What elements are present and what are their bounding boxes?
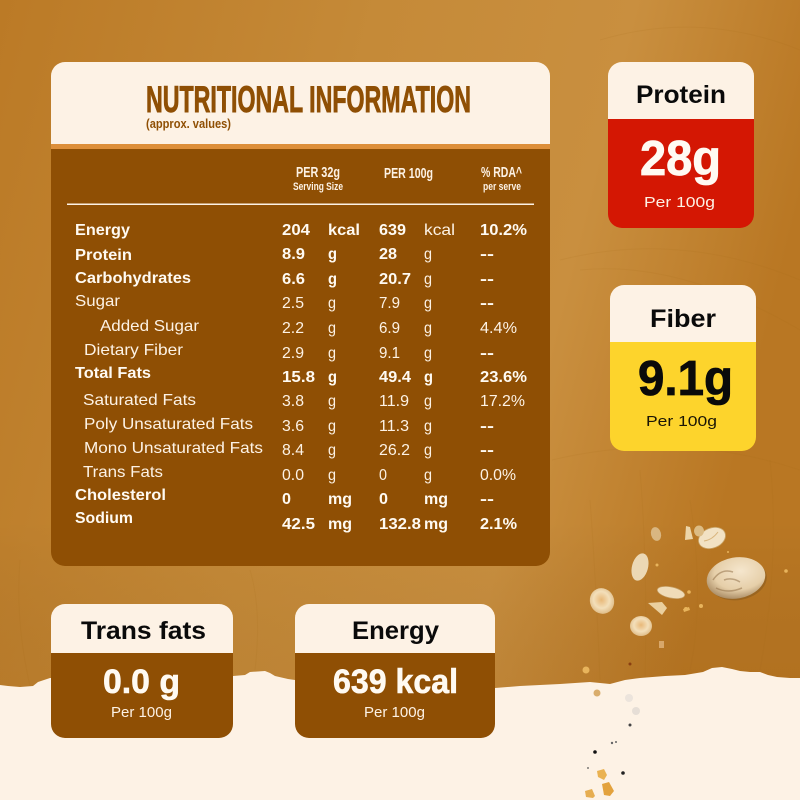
row: sodium: mg [424,516,448,533]
column header: rda [481,164,522,193]
row: protein: -- [480,246,494,263]
row: dietary fiber: -- [480,345,494,362]
row: energy: 10.2% [480,222,527,239]
card: trans fats: Per 100g [111,704,172,721]
row: total fats: 49.4 [379,369,411,386]
row: cholesterol: 0 [282,491,291,508]
row: poly unsaturated fats: Poly Unsaturated Fats [84,416,253,433]
row: mono unsaturated fats: Mono Unsaturated Fats [84,440,263,457]
column header: rda: per serve [483,181,521,193]
row: protein: 28 [379,246,397,263]
row: protein [75,246,494,264]
card: fiber [610,285,756,451]
row: total fats: 15.8 [282,369,315,386]
row: sugar: 7.9 [379,295,400,312]
row: saturated fats: 17.2% [480,393,525,410]
panel: nutritional information [51,62,550,566]
illustration: nuts and crumbs [582,523,788,798]
panel header [51,62,550,144]
card: energy: Per 100g [364,704,425,721]
row: sodium: Sodium [75,510,133,527]
row: saturated fats: g [424,393,432,410]
accent strip [51,144,550,150]
row: protein: Protein [75,247,132,264]
card: fiber: Per 100g [646,413,717,430]
column header: per 32g: Serving Size [293,181,343,193]
row: carbohydrates: 6.6 [282,271,305,288]
icon: large almond [703,553,770,605]
row: trans fats: 0.0 [282,467,304,484]
row: carbohydrates: g [328,271,337,288]
row: added sugar: g [328,320,336,337]
row: added sugar: 4.4% [480,320,517,337]
card: energy: 639 kcal [333,663,458,701]
row: poly unsaturated fats: g [328,418,336,435]
row: energy: kcal [328,222,360,239]
row: carbohydrates: Carbohydrates [75,270,191,287]
card: energy: Energy [352,617,439,645]
card: protein: Protein [636,81,726,109]
column header: per 32g: PER 32g [296,164,340,181]
row: sodium [75,510,517,533]
row: mono unsaturated fats: 8.4 [282,442,304,459]
row: protein: 8.9 [282,246,305,263]
row: cholesterol: Cholesterol [75,487,166,504]
row: carbohydrates: g [424,271,432,288]
row: poly unsaturated fats: g [424,418,432,435]
row: sugar: Sugar [75,293,121,310]
panel body [51,149,550,566]
row: dietary fiber: g [328,345,336,362]
title: NUTRITIONAL INFORMATION [146,79,471,120]
row: saturated fats [83,392,525,410]
row: added sugar: g [424,320,432,337]
row: dietary fiber: 9.1 [379,345,400,362]
row: carbohydrates: -- [480,271,494,288]
row: sodium: 132.8 [379,516,421,533]
row: mono unsaturated fats: -- [480,442,494,459]
row: carbohydrates: 20.7 [379,271,411,288]
row: sugar: g [424,295,432,312]
row: saturated fats: 3.8 [282,393,304,410]
card: trans fats: Trans fats [81,617,206,645]
row: sugar: g [328,295,336,312]
row: sugar: 2.5 [282,295,304,312]
row: cholesterol [75,487,494,508]
card: protein: 28g [640,132,721,186]
card: trans fats: 0.0 g [103,663,180,701]
row: trans fats: 0 [379,467,387,484]
row: mono unsaturated fats: g [328,442,336,459]
row: total fats: g [424,369,433,386]
row: poly unsaturated fats: -- [480,418,494,435]
row: protein: g [424,246,432,263]
row: energy: Energy [75,222,130,239]
row: cholesterol: -- [480,491,494,508]
row: added sugar [100,318,517,337]
row: saturated fats: g [328,393,336,410]
row: energy: 204 [282,222,310,239]
row: mono unsaturated fats: 26.2 [379,442,410,459]
row: energy: 639 [379,222,406,239]
row: sugar [75,293,494,312]
card: trans fats [51,604,233,738]
subtitle: (approx. values) [146,116,231,131]
row: dietary fiber [84,342,494,362]
column header: per 32g [293,164,343,193]
torn cream paper [0,667,800,800]
row: energy: kcal [424,222,455,239]
row: mono unsaturated fats: g [424,442,432,459]
card: energy [295,604,495,738]
row: sodium: mg [328,516,352,533]
column header: per 100g: PER 100g [384,165,433,182]
row: cholesterol: mg [328,491,352,508]
row: trans fats: Trans Fats [83,464,163,481]
card: protein: Per 100g [644,194,715,211]
row: added sugar: Added Sugar [100,318,200,335]
row: trans fats [83,464,516,484]
row: total fats: g [328,369,337,386]
row: poly unsaturated fats: 11.3 [379,418,409,435]
card: protein [608,62,754,228]
row: poly unsaturated fats [84,416,494,435]
row: cholesterol: mg [424,491,448,508]
row: protein: g [328,246,337,263]
row: added sugar: 6.9 [379,320,400,337]
row: energy [75,222,527,239]
row: total fats [75,365,527,386]
row: dietary fiber: Dietary Fiber [84,342,184,359]
row: trans fats: g [328,467,336,484]
row: trans fats: g [424,467,432,484]
row: saturated fats: 11.9 [379,393,409,410]
row: mono unsaturated fats [84,440,494,459]
row: trans fats: 0.0% [480,467,516,484]
card: fiber: 9.1g [638,352,733,406]
row: carbohydrates [75,270,494,288]
row: total fats: 23.6% [480,369,527,386]
row: saturated fats: Saturated Fats [83,392,196,409]
card: fiber: Fiber [650,305,716,333]
row: added sugar: 2.2 [282,320,304,337]
row: dietary fiber: 2.9 [282,345,304,362]
row: dietary fiber: g [424,345,432,362]
icon: peanut pieces [586,523,729,636]
row: sodium: 42.5 [282,516,315,533]
row: sodium: 2.1% [480,516,517,533]
row: poly unsaturated fats: 3.6 [282,418,304,435]
row: sugar: -- [480,295,494,312]
row: total fats: Total Fats [75,365,151,382]
row: cholesterol: 0 [379,491,388,508]
icon: crumbs [582,551,788,798]
column header: rda: % RDA^ [481,164,522,181]
